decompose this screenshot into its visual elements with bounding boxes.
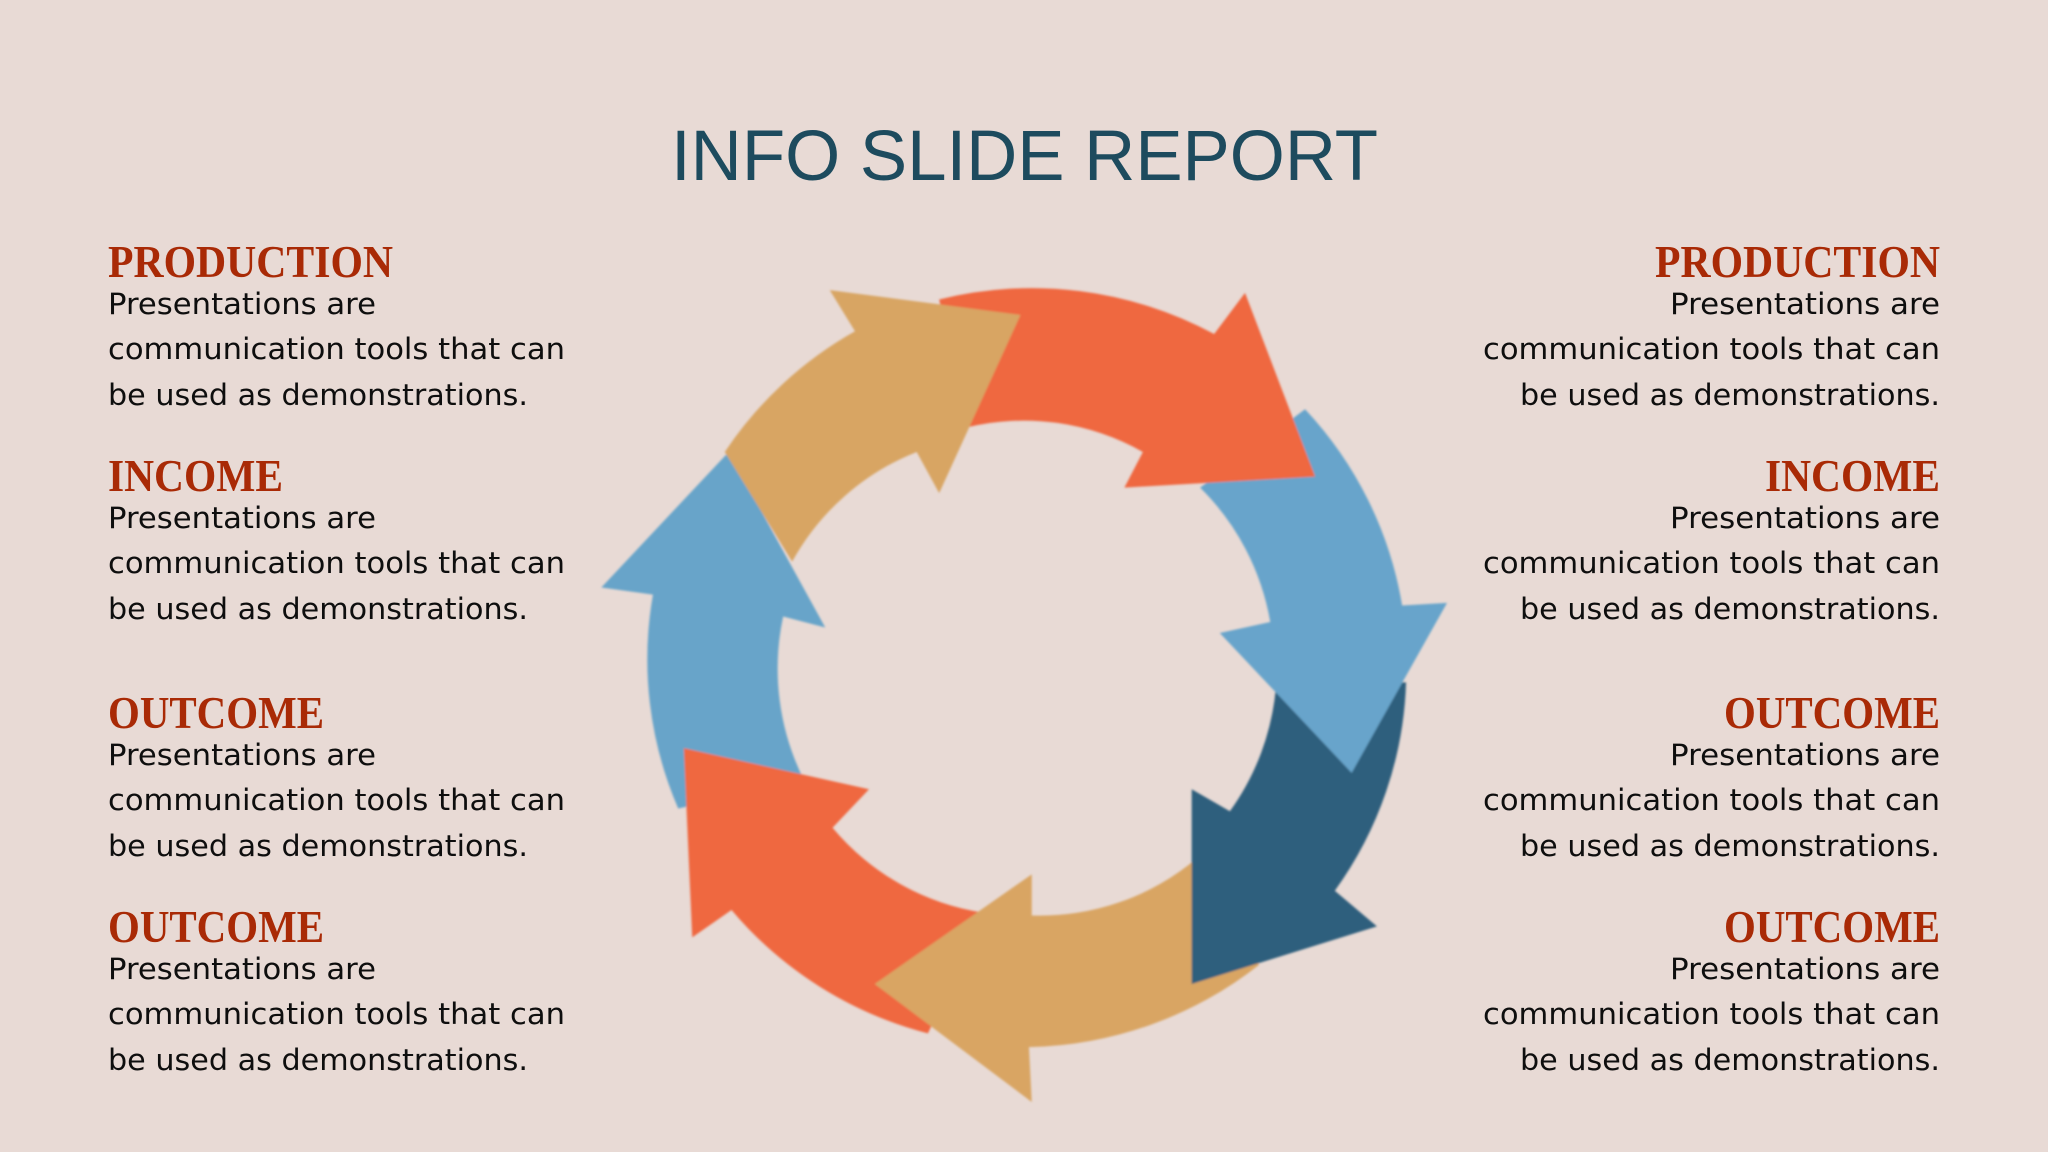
arrow: red bottom left	[684, 748, 984, 1033]
right block: production: be used as demonstrations.	[1520, 378, 1940, 412]
right block: production: Presentations are	[1670, 287, 1940, 321]
left block: production: communication tools that can	[108, 332, 565, 366]
left block: income: INCOME	[108, 450, 283, 501]
right text column	[1483, 236, 1940, 1077]
left block: outcome 1: communication tools that can	[108, 783, 565, 817]
left block: outcome 2: Presentations are	[108, 952, 376, 986]
left block: outcome 1: OUTCOME	[108, 687, 324, 738]
left block: production: Presentations are	[108, 287, 376, 321]
left block: outcome 2	[108, 901, 565, 1077]
arrow: tan top left	[725, 290, 1021, 562]
right block: income: Presentations are	[1670, 501, 1940, 535]
right block: outcome 2: Presentations are	[1670, 952, 1940, 986]
right block: income	[1483, 450, 1940, 626]
arrow: dark blue	[1192, 682, 1406, 984]
left block: outcome 2: OUTCOME	[108, 901, 324, 952]
left text column	[108, 236, 565, 1077]
right block: outcome 2: communication tools that can	[1483, 997, 1940, 1031]
arrow: red top	[939, 288, 1315, 488]
left block: outcome 2: communication tools that can	[108, 997, 565, 1031]
right block: outcome 1: be used as demonstrations.	[1520, 829, 1940, 863]
right block: income: INCOME	[1765, 450, 1940, 501]
right block: production: communication tools that can	[1483, 332, 1940, 366]
right block: outcome 2: be used as demonstrations.	[1520, 1043, 1940, 1077]
left block: outcome 2: be used as demonstrations.	[108, 1043, 528, 1077]
right block: outcome 1: communication tools that can	[1483, 783, 1940, 817]
left block: outcome 1: Presentations are	[108, 738, 376, 772]
right block: income: communication tools that can	[1483, 546, 1940, 580]
title: INFO SLIDE REPORT	[671, 117, 1378, 196]
right block: income: be used as demonstrations.	[1520, 592, 1940, 626]
left block: production: PRODUCTION	[108, 236, 393, 287]
arrow: blue left	[601, 452, 825, 809]
right block: outcome 1: Presentations are	[1670, 738, 1940, 772]
circular arrow cycle diagram	[601, 288, 1447, 1102]
left block: income: communication tools that can	[108, 546, 565, 580]
left block: income	[108, 450, 565, 626]
right block: outcome 2	[1483, 901, 1940, 1077]
arrow: blue right	[1200, 409, 1447, 773]
right block: outcome 1: OUTCOME	[1724, 687, 1940, 738]
arrow: tan bottom	[875, 858, 1259, 1102]
left block: production	[108, 236, 565, 412]
right block: production: PRODUCTION	[1655, 236, 1940, 287]
left block: outcome 1: be used as demonstrations.	[108, 829, 528, 863]
left block: outcome 1	[108, 687, 565, 863]
left block: income: be used as demonstrations.	[108, 592, 528, 626]
right block: outcome 1	[1483, 687, 1940, 863]
right block: outcome 2: OUTCOME	[1724, 901, 1940, 952]
left block: production: be used as demonstrations.	[108, 378, 528, 412]
right block: production	[1483, 236, 1940, 412]
left block: income: Presentations are	[108, 501, 376, 535]
